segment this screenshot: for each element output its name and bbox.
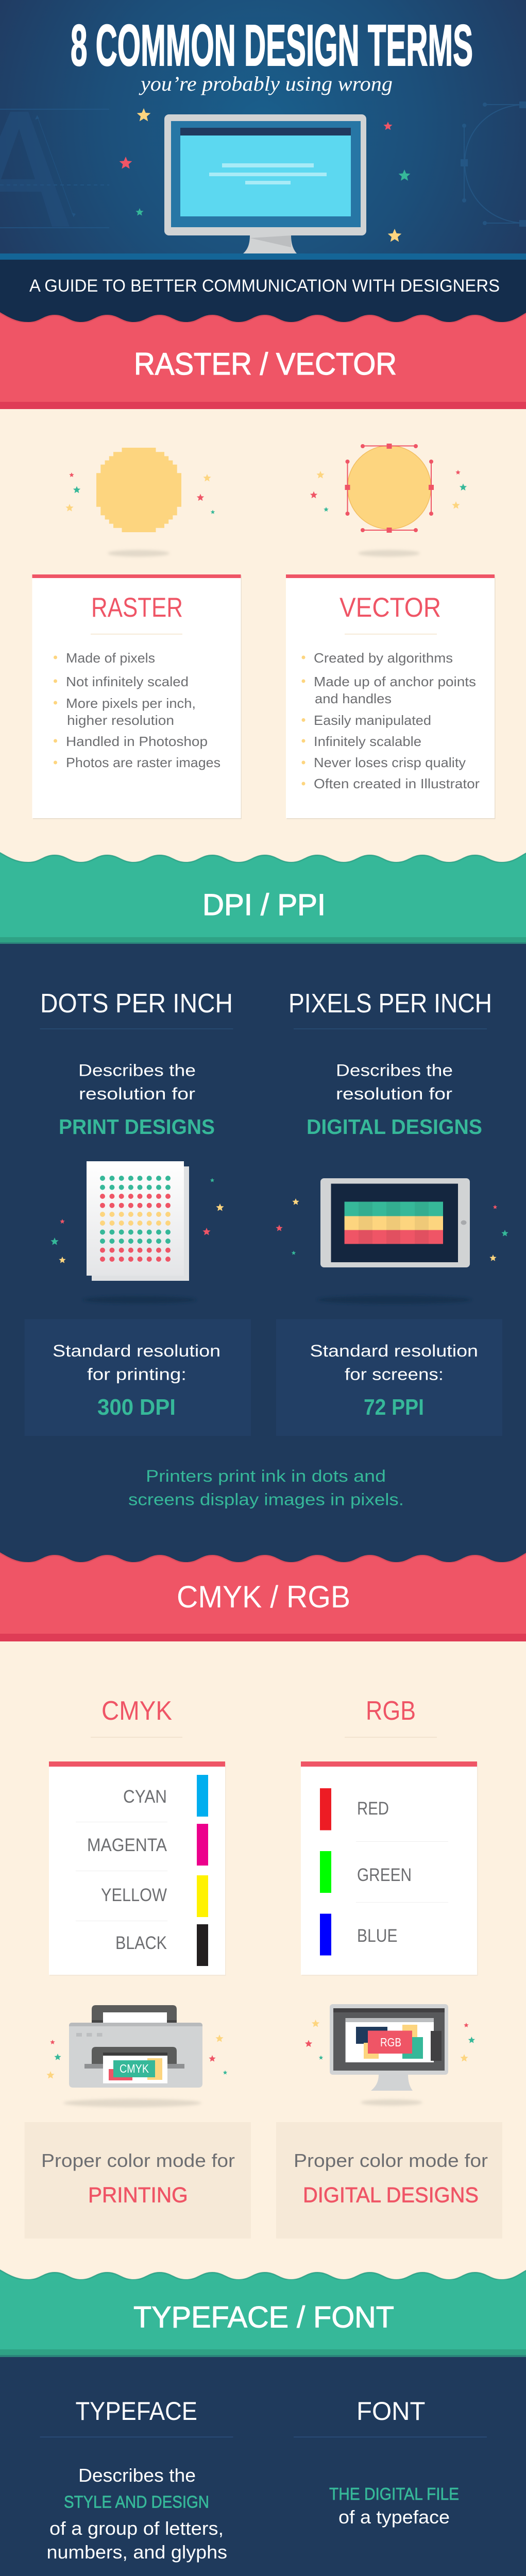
list: vector facts: Made up of anchor points: [314, 674, 476, 689]
decorative typography graphic: letter A: [0, 109, 109, 228]
stars: paper: [50, 1178, 224, 1263]
panel: vector card: [286, 574, 496, 819]
panel: cmyk card: [49, 1761, 226, 1976]
heading: vector: VECTOR: [340, 592, 441, 623]
callout: printing: [25, 2122, 251, 2239]
highlight: print designs: PRINT DESIGNS: [59, 1115, 215, 1139]
callout: digital designs: [276, 2122, 502, 2239]
list: vector facts: Easily manipulated: [314, 713, 431, 728]
list: vector facts: and handles: [315, 691, 392, 706]
callout: digital designs: DIGITAL DESIGNS: [303, 2182, 479, 2207]
list: vector facts: Often created in Illustrator: [314, 776, 480, 791]
column: font text: of a typeface: [338, 2506, 450, 2528]
icon: vector circle with handles: [345, 444, 434, 533]
icon: printer: [69, 2005, 202, 2088]
callout: 72 ppi: [276, 1319, 502, 1436]
list: vector facts: Infinitely scalable: [314, 734, 421, 749]
icon: pixelated circle: [96, 448, 181, 532]
heading: cmyk: CMYK: [101, 1696, 172, 1726]
caption: printers and screens: screens display images in pixels.: [128, 1490, 404, 1509]
shadow: paper: [83, 1296, 196, 1303]
list: raster facts: [54, 650, 220, 770]
stars: rgb monitor: [305, 2020, 475, 2061]
panel: raster vector background: [0, 409, 526, 862]
panel: rgb card: [301, 1761, 478, 1976]
label and swatch: magenta: [87, 1824, 208, 1866]
stars: tablet: [276, 1198, 508, 1261]
panel: dpi ppi background: [0, 944, 526, 1562]
stars: header: [120, 108, 410, 242]
icon: tablet with colour stripes: [320, 1178, 470, 1267]
list: raster facts: higher resolution: [67, 713, 174, 728]
callout: 300 dpi: 300 DPI: [97, 1395, 176, 1420]
label and swatch: yellow: YELLOW: [101, 1885, 167, 1905]
shadow: rgb monitor: [361, 2099, 422, 2106]
stars: vector: [310, 470, 467, 512]
description: ppi: Describes the: [336, 1061, 453, 1080]
label: cmyk sample: CMYK: [120, 2062, 149, 2075]
subheading guide: A GUIDE TO BETTER COMMUNICATION WITH DESIGNERS: [29, 276, 500, 296]
column: font text: [294, 2397, 487, 2528]
description: font: THE DIGITAL FILE: [329, 2484, 459, 2503]
heading: rgb: RGB: [366, 1696, 416, 1726]
section band: raster vector: [0, 312, 526, 409]
heading: typeface: TYPEFACE: [75, 2397, 197, 2426]
column: dots per inch text: [40, 989, 233, 1139]
list: raster facts: Made of pixels: [66, 650, 155, 666]
label and swatch: cyan: [123, 1775, 208, 1817]
label and swatch: magenta: MAGENTA: [87, 1835, 167, 1855]
panel: typeface font background: [0, 2357, 526, 2576]
icon: monitor: [164, 114, 366, 253]
caption: printers and screens: Printers print ink in dots and: [146, 1467, 386, 1485]
caption: printers and screens: [128, 1467, 404, 1509]
section band: cmyk rgb: [0, 1552, 526, 1641]
heading: pixels per inch: PIXELS PER INCH: [289, 989, 492, 1019]
shadow: printer: [63, 2099, 201, 2107]
list: raster facts: Not infinitely scaled: [66, 674, 189, 689]
decorative vector graphic: bezier curve: [461, 101, 526, 227]
column: typeface text: numbers, and glyphs: [46, 2541, 227, 2563]
column: typeface text: [40, 2397, 233, 2563]
list: raster facts: Handled in Photoshop: [66, 734, 208, 749]
column: typeface text: of a group of letters,: [49, 2518, 224, 2539]
description: typeface: Describes the: [78, 2465, 196, 2486]
list: vector facts: Never loses crisp quality: [314, 755, 466, 770]
panel: raster card: [32, 574, 242, 819]
shadow: raster circle: [108, 550, 169, 556]
callout: printing: PRINTING: [88, 2182, 188, 2207]
shadow: tablet: [317, 1296, 472, 1304]
description: dpi: Describes the: [78, 1061, 196, 1080]
label and swatch: red: [320, 1788, 389, 1830]
callout: 72 ppi: 72 PPI: [364, 1395, 424, 1420]
list: raster facts: More pixels per inch,: [66, 696, 196, 711]
section band: typeface font: [0, 2269, 526, 2357]
heading: typeface font: TYPEFACE / FONT: [133, 2301, 394, 2334]
stars: raster: [65, 472, 215, 514]
icon: rgb monitor: [330, 2004, 448, 2091]
label and swatch: black: BLACK: [115, 1933, 167, 1953]
column: dots per inch text: resolution for: [79, 1084, 195, 1103]
panel: header background: [0, 0, 526, 324]
list: vector facts: [302, 650, 480, 791]
subtitle: you’re probably using wrong: [139, 72, 393, 95]
callout: digital designs: Proper color mode for: [294, 2150, 488, 2171]
label and swatch: black: [115, 1924, 208, 1966]
highlight: digital designs: DIGITAL DESIGNS: [307, 1115, 482, 1139]
callout: 72 ppi: Standard resolution: [310, 1342, 478, 1360]
panel: cmyk rgb background: [0, 1641, 526, 2280]
heading: cmyk rgb: CMYK / RGB: [177, 1580, 350, 1614]
heading: dpi ppi: DPI / PPI: [202, 888, 326, 922]
column: typeface text: STYLE AND DESIGN: [64, 2493, 209, 2511]
list: vector facts: Created by algorithms: [314, 650, 453, 666]
callout: 300 dpi: [25, 1319, 251, 1436]
label and swatch: yellow: [101, 1875, 208, 1917]
heading: font: FONT: [357, 2397, 426, 2426]
list: raster facts: Photos are raster images: [66, 755, 220, 770]
label and swatch: green: [320, 1851, 412, 1893]
label and swatch: cyan: CYAN: [123, 1787, 167, 1807]
heading: dots per inch: DOTS PER INCH: [40, 989, 233, 1019]
section band: dpi ppi: [0, 852, 526, 944]
label and swatch: green: GREEN: [357, 1865, 412, 1885]
callout: 300 dpi: for printing:: [87, 1365, 186, 1384]
heading: raster vector: RASTER / VECTOR: [134, 347, 397, 381]
callout: 300 dpi: Standard resolution: [53, 1342, 220, 1360]
stars: printer: [46, 2035, 227, 2078]
label and swatch: blue: [320, 1913, 398, 1956]
column: pixels per inch text: [289, 989, 492, 1139]
callout: 72 ppi: for screens:: [345, 1365, 444, 1384]
column: pixels per inch text: resolution for: [336, 1084, 452, 1103]
heading: raster: RASTER: [91, 592, 183, 623]
label and swatch: blue: BLUE: [357, 1926, 398, 1946]
callout: printing: Proper color mode for: [41, 2150, 235, 2171]
icon: printed paper with dots: [87, 1161, 189, 1281]
label and swatch: red: RED: [357, 1799, 389, 1819]
shadow: vector circle: [358, 550, 420, 556]
label: rgb sample: RGB: [380, 2036, 401, 2049]
